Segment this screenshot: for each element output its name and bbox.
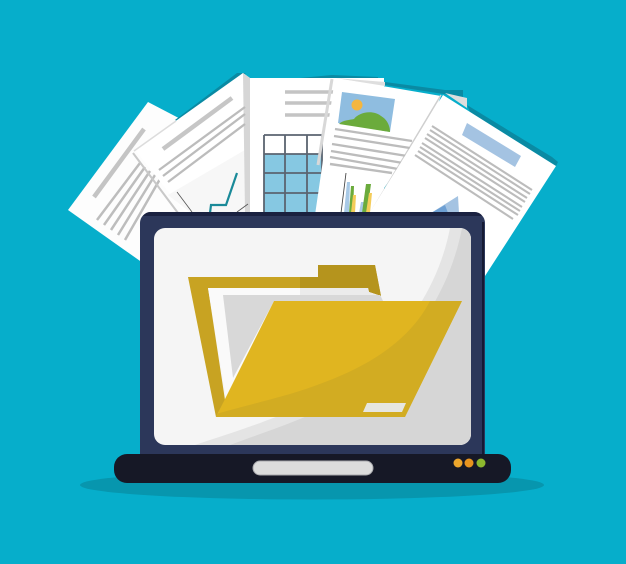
- folder paper: [208, 288, 383, 398]
- mini bar chart: [341, 173, 372, 213]
- folder label: [363, 403, 406, 412]
- infographic: laptop with folder and documents: [68, 73, 558, 500]
- laptop: [140, 212, 485, 467]
- laptop lid: [140, 212, 485, 467]
- paper: far left document: [68, 102, 240, 268]
- folder: [188, 265, 462, 417]
- paper: front right document: [368, 95, 558, 276]
- paper: photo document: [315, 78, 467, 215]
- paper: tilted chart document: [133, 73, 250, 225]
- ground shadow: [80, 470, 544, 500]
- laptop base: [114, 454, 511, 483]
- indicator lights: [454, 458, 486, 468]
- blue title bar: [462, 123, 521, 167]
- paper: table document: [250, 75, 384, 215]
- trackpad: [253, 461, 373, 475]
- folder back: [188, 265, 381, 417]
- laptop screen: [154, 228, 471, 445]
- folder front: [216, 301, 462, 417]
- photo thumbnail: [338, 92, 395, 132]
